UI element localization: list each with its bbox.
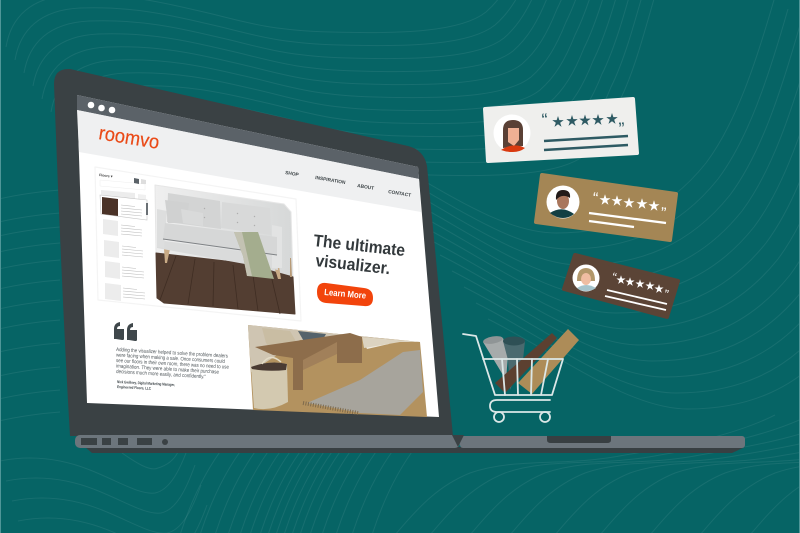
text lines xyxy=(589,213,666,227)
text lines xyxy=(605,290,667,310)
quotes: ” xyxy=(662,286,670,302)
review card 1 xyxy=(485,99,637,161)
laptop xyxy=(54,69,453,436)
quotes: ” xyxy=(618,119,625,139)
roomvo logo: roomvo xyxy=(97,122,161,154)
quotes xyxy=(541,110,625,139)
rug xyxy=(307,350,423,415)
sofa photo xyxy=(155,185,295,314)
quote text: Adding the visualizer helped to solve the problem dealers xyxy=(116,347,228,360)
quote text: were facing when making a sale. Once consumers could xyxy=(116,353,225,365)
ports xyxy=(81,438,168,445)
sofa xyxy=(157,193,292,279)
headline: visualizer. xyxy=(315,251,391,278)
navigation xyxy=(285,170,412,199)
selected item xyxy=(100,195,147,220)
cushions xyxy=(262,328,298,350)
laptop screen xyxy=(77,95,439,417)
basket xyxy=(251,363,288,409)
bench xyxy=(255,333,362,390)
attribution xyxy=(117,379,175,391)
attribution: Engineered Floors, LLC xyxy=(117,384,151,391)
card background xyxy=(564,255,678,317)
avatar xyxy=(572,264,600,292)
text lines xyxy=(544,136,628,150)
stars xyxy=(616,275,664,293)
quotes xyxy=(592,190,667,223)
trackpad notch xyxy=(547,436,611,443)
wood plank dark xyxy=(495,333,557,393)
base shadow xyxy=(85,447,745,453)
navigation: CONTACT xyxy=(388,189,412,199)
learn more button: Learn More xyxy=(324,287,367,301)
quote text: decisions much more easily, and confidently." xyxy=(116,369,206,380)
laptop lid xyxy=(54,69,453,436)
review card 3 xyxy=(564,255,678,317)
attribution: Nick Gwiliney, Digital Marketing Manager, xyxy=(117,379,175,387)
card background xyxy=(536,175,676,240)
room photo xyxy=(248,325,427,417)
avatar xyxy=(546,186,580,218)
flooring rolls xyxy=(483,338,508,380)
quote text xyxy=(116,347,229,380)
quote text: imagination. They were able to make their purchase xyxy=(116,364,219,376)
headline xyxy=(313,231,406,278)
headline: The ultimate xyxy=(313,231,406,260)
site header xyxy=(77,110,421,212)
left base xyxy=(75,435,460,448)
quotes: “ xyxy=(592,190,599,208)
quotes: “ xyxy=(610,269,618,285)
stars xyxy=(552,113,618,127)
learn more button xyxy=(317,283,373,306)
review card 2 xyxy=(536,175,676,240)
visualizer widget frame xyxy=(95,167,301,321)
scrollbar xyxy=(146,203,148,215)
wall xyxy=(155,185,293,278)
wood floor xyxy=(248,325,427,417)
wood floor xyxy=(156,253,295,314)
hinge xyxy=(452,435,464,447)
navigation: ABOUT xyxy=(357,183,375,192)
testimonial xyxy=(114,322,229,391)
quotes: ” xyxy=(660,205,667,223)
laptop base xyxy=(75,435,745,453)
stars xyxy=(599,194,660,211)
wall xyxy=(248,325,420,372)
page background xyxy=(77,95,439,417)
wood plank tan xyxy=(518,329,579,394)
quote marks xyxy=(114,322,137,341)
navigation: INSPIRATION xyxy=(315,175,346,186)
card background xyxy=(485,99,637,161)
quote text: see our floors in their own room, there was no need to use xyxy=(116,358,229,371)
navigation: SHOP xyxy=(285,170,300,178)
browser bar xyxy=(77,95,419,179)
avatar xyxy=(494,114,530,152)
quotes xyxy=(610,269,670,302)
product sidebar: Floors ▾ xyxy=(99,173,114,179)
product sidebar xyxy=(99,173,148,301)
quotes: “ xyxy=(541,110,548,130)
right base xyxy=(460,436,745,448)
cart frame xyxy=(463,334,563,422)
blanket xyxy=(234,232,274,279)
shopping cart xyxy=(463,329,579,422)
